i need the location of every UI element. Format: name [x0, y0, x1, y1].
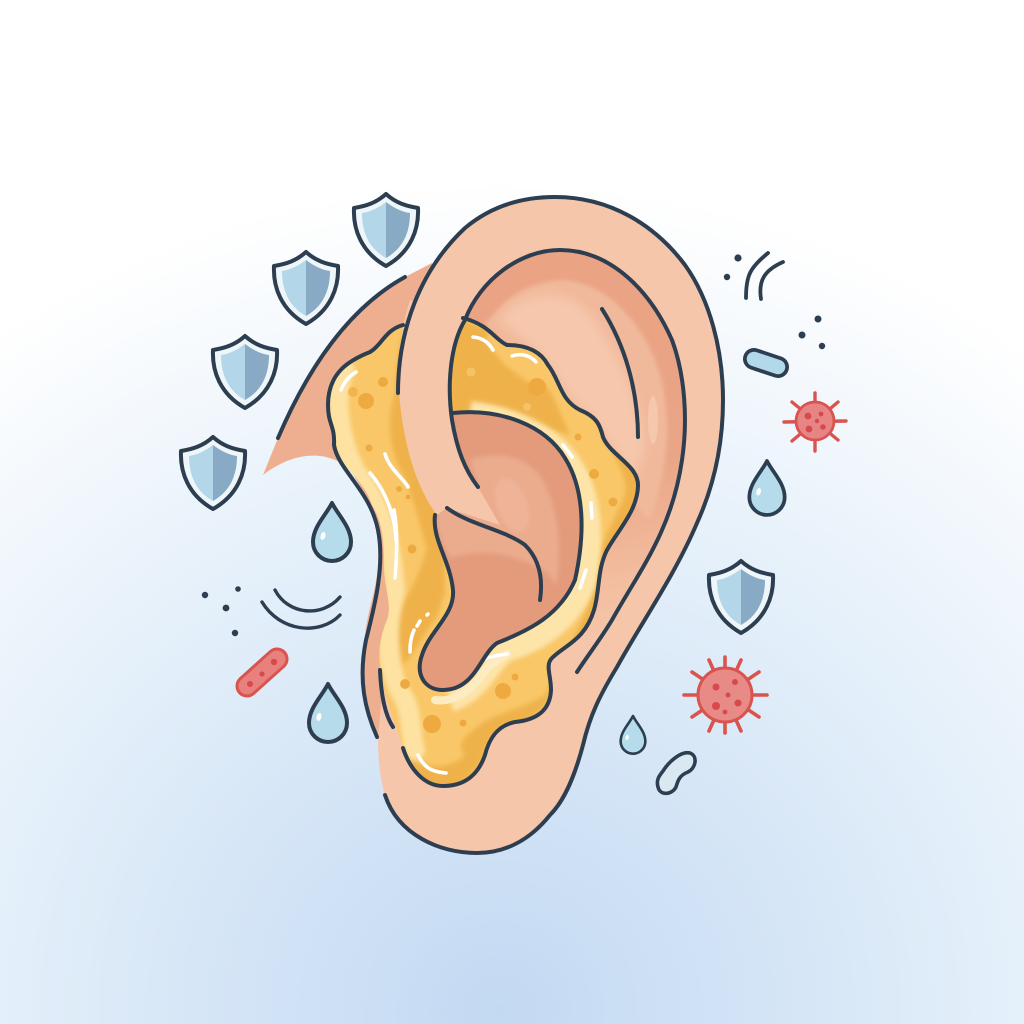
icon: outlined kidney bacterium	[657, 753, 695, 793]
icon: shield 2	[274, 252, 338, 324]
icon: shield 1	[354, 194, 418, 266]
icon: red virus small	[784, 393, 846, 451]
concha soft patch	[488, 474, 536, 536]
concha lighter upper area	[437, 455, 559, 585]
icon: water drop left upper	[313, 503, 351, 561]
antihelix inner highlight	[500, 295, 645, 480]
dark wax top	[450, 315, 570, 435]
outer ear and lobe	[378, 197, 723, 853]
wax base	[328, 318, 638, 786]
light rim along concha	[450, 413, 589, 700]
icon: small water drop	[621, 716, 645, 754]
small highlight on fold	[648, 396, 658, 444]
wax shading	[338, 315, 641, 790]
light rim left	[338, 370, 415, 750]
icon: shield 5	[709, 561, 773, 633]
ear wax	[328, 315, 641, 790]
outline: wax top left	[328, 325, 403, 737]
ear outlines	[278, 197, 723, 853]
outline: antitragus curve	[447, 508, 541, 600]
outline: fold line	[602, 309, 638, 437]
icon: shield 4	[181, 437, 245, 509]
ear	[263, 197, 723, 853]
icon: red virus large	[684, 657, 767, 733]
outline: helix and lobe	[385, 197, 723, 853]
outline: concha	[420, 412, 582, 690]
dark wax near helix	[390, 325, 445, 600]
antihelix highlight	[485, 280, 667, 520]
outline: back of ear	[278, 277, 405, 438]
icon: sound waves and dots right	[724, 253, 825, 349]
wax spots	[348, 368, 618, 733]
wax highlights	[341, 337, 592, 773]
icon: shield 3	[213, 336, 277, 408]
icon: red bacterium	[247, 659, 277, 687]
dark wax edge right	[410, 453, 636, 784]
concha bowl	[420, 412, 582, 690]
soft wax gleam under the concha	[435, 654, 507, 700]
inner fold of the ear	[450, 250, 685, 690]
outline: lower left wax	[380, 670, 393, 727]
icon: blue bacterium pill	[754, 359, 778, 367]
helix fold over the wax	[398, 300, 500, 525]
dark wax lower left	[398, 551, 444, 664]
icon: water drop right	[749, 461, 785, 515]
icon: water drop left lower	[309, 684, 347, 742]
icon: sound waves and dots left	[202, 586, 340, 636]
outline: inner helix	[450, 250, 685, 672]
ear back: darker skin on the left	[263, 263, 470, 745]
outline: wax right	[403, 318, 638, 786]
